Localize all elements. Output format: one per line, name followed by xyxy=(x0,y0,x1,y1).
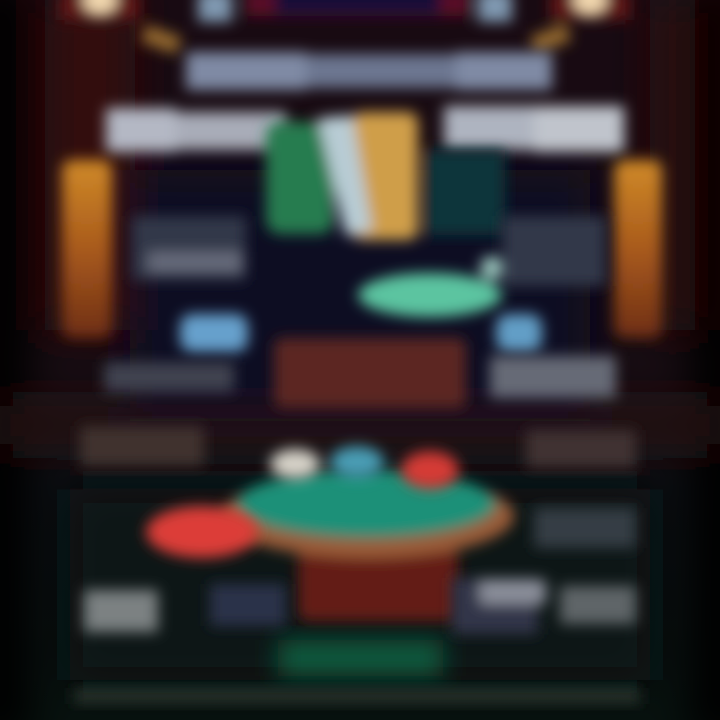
light blue badge left xyxy=(180,314,248,352)
text block: mid left xyxy=(104,362,234,392)
footer strip xyxy=(74,688,640,704)
panel: upper right text xyxy=(502,216,606,286)
title xyxy=(106,52,624,152)
left pillar xyxy=(62,160,112,338)
text block: table right xyxy=(534,508,636,548)
bottom left dark panel xyxy=(210,584,286,626)
text block: bottom right xyxy=(452,578,636,634)
panel: upper left text xyxy=(132,216,246,280)
text block: lower left xyxy=(80,426,204,466)
central card fan illustration xyxy=(266,112,505,240)
light blue badge right xyxy=(496,314,542,352)
chips on table xyxy=(270,446,459,489)
top decoration xyxy=(60,0,630,54)
text block: mid right xyxy=(490,356,616,398)
mint green chip ellipse xyxy=(358,256,504,317)
text block: bottom left xyxy=(84,590,158,632)
green floor band xyxy=(278,640,443,676)
center brown panel xyxy=(274,338,466,408)
text block: lower right xyxy=(526,430,636,468)
red chip left xyxy=(146,506,258,558)
right pillar xyxy=(614,160,662,338)
poker table xyxy=(222,470,514,621)
